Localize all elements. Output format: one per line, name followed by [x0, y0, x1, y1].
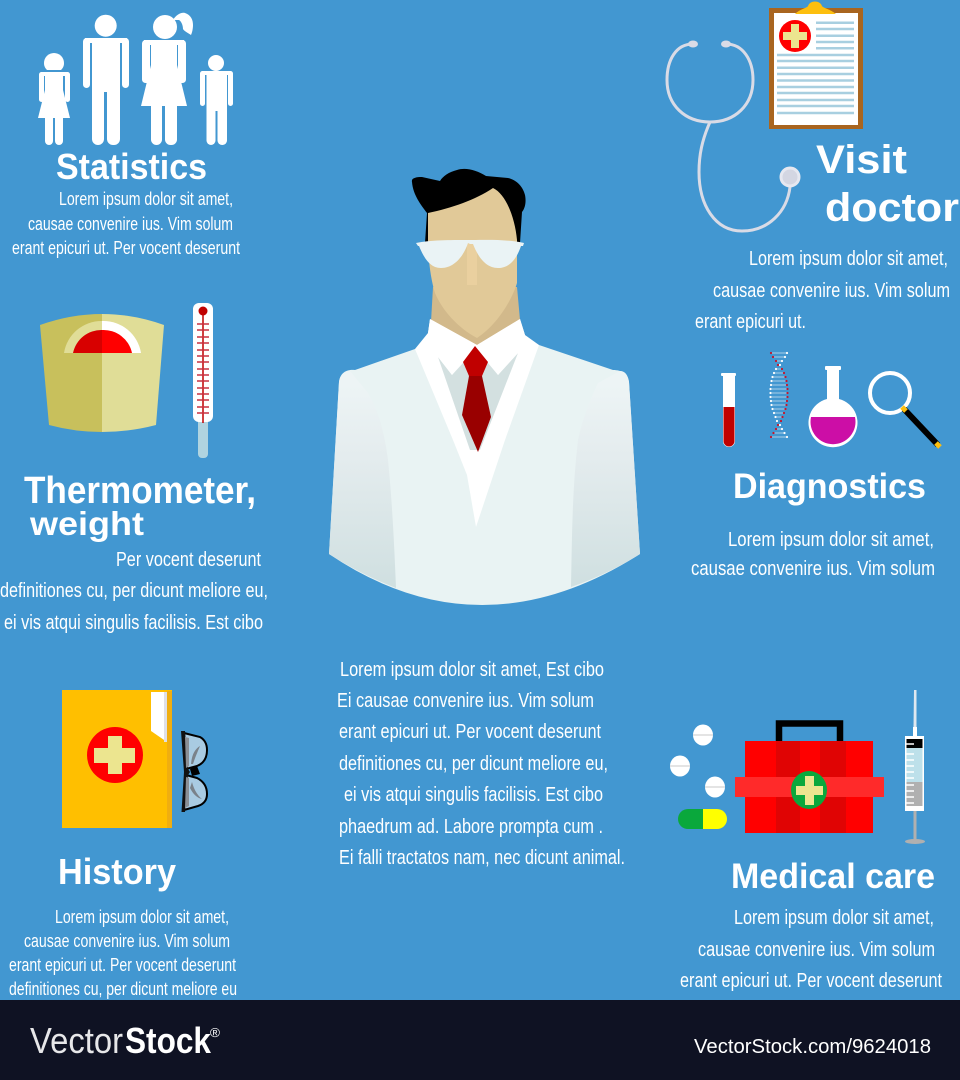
- text block: statistics: [12, 189, 240, 258]
- doctor hair: [412, 169, 526, 243]
- footer logo: Stock: [125, 1020, 212, 1061]
- footer logo: ®: [210, 1025, 220, 1040]
- text block: diagnostics: [691, 529, 935, 580]
- panel: medical care: [670, 690, 942, 992]
- doctor tie: [462, 346, 491, 452]
- text block: statistics: causae convenire ius. Vim solum: [28, 214, 233, 234]
- text block: centre: Lorem ipsum dolor sit amet, Est cibo: [340, 659, 604, 681]
- doctor collar: [428, 319, 525, 375]
- panel: visit doctor: [667, 2, 959, 333]
- text block: centre: erant epicuri ut. Per vocent deserunt: [339, 721, 601, 743]
- illustration: doctor: [329, 169, 640, 605]
- icon: clipboard: [769, 2, 863, 129]
- icon: scale: [40, 314, 164, 432]
- icon: folder: [62, 690, 172, 828]
- heading: visit doctor: Visit: [816, 138, 907, 182]
- icon: stethoscope: [667, 40, 799, 231]
- text block: centre: definitiones cu, per dicunt meliore eu,: [339, 753, 608, 775]
- heading: diagnostics: Diagnostics: [733, 467, 926, 506]
- text block: history: causae convenire ius. Vim solum: [24, 931, 230, 951]
- footer bar: [0, 1000, 960, 1080]
- text block: history: definitiones cu, per dicunt meliore eu: [9, 979, 237, 999]
- text block: centre: phaedrum ad. Labore prompta cum .: [339, 816, 603, 838]
- text block: history: [9, 907, 237, 999]
- doctor neck: [431, 287, 520, 347]
- icon: test tube: [721, 373, 736, 447]
- icon: family: [38, 13, 233, 145]
- text block: medical care: [680, 907, 942, 992]
- icon: flask: [808, 366, 858, 447]
- footer logo: [30, 1020, 220, 1061]
- icon: first aid kit: [735, 724, 884, 833]
- text block: statistics: erant epicuri ut. Per vocent deserunt: [12, 238, 240, 258]
- text block: centre: ei vis atqui singulis facilisis. Est cibo: [344, 784, 603, 806]
- doctor nose: [467, 243, 477, 285]
- text block: thermometer: ei vis atqui singulis facilisis. Est cibo: [4, 612, 263, 634]
- text block: thermometer: [0, 549, 268, 634]
- heading: visit doctor: doctor: [825, 186, 959, 230]
- text block: history: Lorem ipsum dolor sit amet,: [55, 907, 229, 927]
- panel: thermometer and weight: [0, 303, 268, 634]
- footer url: VectorStock.com/9624018: [694, 1036, 931, 1058]
- heading: thermometer, weight: [24, 470, 256, 542]
- heading: medical care: Medical care: [731, 857, 935, 896]
- text block: centre: Ei causae convenire ius. Vim solum: [337, 690, 594, 712]
- icon: glasses: [181, 731, 207, 812]
- panel: history: [9, 690, 237, 999]
- text block: history: erant epicuri ut. Per vocent deserunt: [9, 955, 236, 975]
- icon: dna: [770, 353, 788, 437]
- doctor shirt: [438, 353, 518, 450]
- doctor suit: [329, 330, 640, 605]
- heading: history: History: [58, 851, 176, 892]
- icon: syringe: [905, 690, 925, 844]
- text block: thermometer: definitiones cu, per dicunt meliore eu,: [0, 580, 268, 602]
- heading: thermometer, weight: weight: [29, 505, 144, 542]
- heading: statistics: Statistics: [56, 146, 207, 187]
- text block: visit doctor: erant epicuri ut.: [695, 311, 806, 333]
- doctor glasses: [416, 240, 524, 268]
- text block: centre: Ei falli tractatos nam, nec dicunt animal.: [339, 847, 625, 869]
- doctor lapels: [415, 319, 539, 527]
- icon: thermometer: [193, 303, 213, 458]
- text block: centre: [337, 659, 625, 869]
- text block: statistics: Lorem ipsum dolor sit amet,: [59, 189, 233, 209]
- text block: thermometer: Per vocent deserunt: [116, 549, 261, 571]
- footer logo: Vector: [30, 1020, 123, 1061]
- icon: pills: [670, 724, 727, 829]
- panel: statistics: [12, 13, 240, 258]
- heading: visit doctor: [816, 138, 959, 230]
- panel: diagnostics: [691, 353, 940, 580]
- heading: thermometer, weight: Thermometer,: [24, 470, 256, 512]
- doctor sleeves: [329, 371, 640, 588]
- doctor face: [428, 188, 517, 338]
- icon: magnifier: [870, 373, 940, 447]
- text block: visit doctor: [695, 248, 950, 333]
